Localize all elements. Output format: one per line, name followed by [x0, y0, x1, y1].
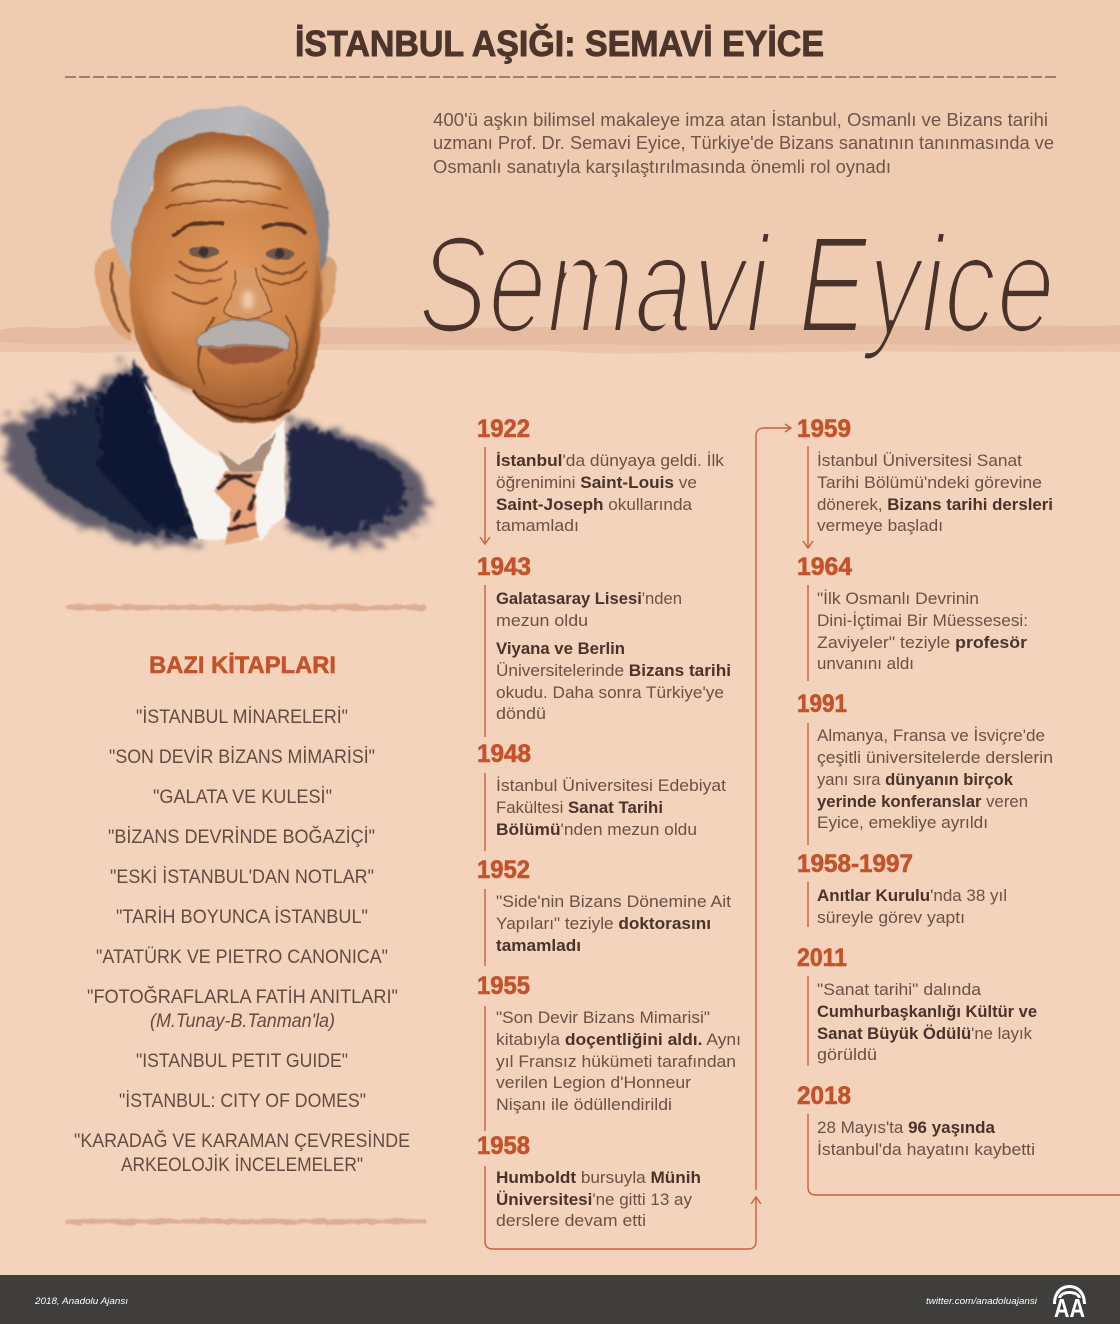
book list: [74, 707, 410, 1176]
timeline: 1943: okudu. Daha sonra Türkiye'ye: [496, 683, 724, 702]
jacket: [28, 362, 406, 538]
timeline: 1948: İstanbul Üniversitesi Edebiyat: [496, 776, 726, 795]
timeline: 1991: 1991: [797, 690, 847, 718]
timeline: 1922: [477, 415, 724, 535]
timeline: 2018: 2018: [797, 1082, 851, 1110]
timeline: 1955: "Son Devir Bizans Mimarisi": [496, 1008, 710, 1027]
timeline: 1948: Fakültesi Sanat Tarihi: [496, 798, 663, 817]
book list: "ATATÜRK VE PIETRO CANONICA": [96, 947, 388, 968]
timeline: 1991: [797, 690, 1053, 832]
intro text: [433, 110, 1054, 177]
timeline: 1952: Yapıları" teziyle doktorasını: [496, 914, 711, 933]
hair: [111, 107, 329, 275]
face: [129, 133, 322, 423]
timeline: 1958-1997: süreyle görev yaptı: [817, 908, 965, 927]
timeline: 1959: vermeye başladı: [817, 516, 943, 535]
timeline: 1991: Almanya, Fransa ve İsviçre'de: [817, 726, 1045, 745]
timeline: 1964: [797, 553, 1028, 673]
icon: AA logo: [1053, 1285, 1086, 1323]
timeline: 2011: 2011: [797, 944, 847, 972]
timeline: 2018: [797, 1082, 1035, 1159]
timeline: 1991: yerinde konferanslar veren: [817, 792, 1028, 811]
timeline connectors: [480, 424, 1120, 1249]
timeline: 1922: İstanbul'da dünyaya geldi. İlk: [496, 451, 724, 470]
title divider: [65, 76, 1056, 78]
jaw line: [193, 390, 290, 419]
timeline: 1943: Viyana ve Berlin: [496, 639, 625, 658]
necktie: [213, 471, 260, 546]
footer: [0, 1275, 1120, 1324]
timeline: 1959: dönerek, Bizans tarihi dersleri: [817, 495, 1053, 514]
timeline: 1958: derslere devam etti: [496, 1211, 646, 1230]
timeline: 2011: görüldü: [817, 1045, 877, 1064]
footer twitter: twitter.com/anadoluajansi: [926, 1296, 1038, 1307]
timeline: 1948: [477, 740, 726, 839]
brows and eyes: [172, 222, 306, 273]
timeline: 1955: kitabıyla doçentliğini aldı. Aynı: [496, 1030, 741, 1049]
timeline: 1948: 1948: [477, 740, 531, 768]
timeline: 1943: mezun oldu: [496, 611, 588, 630]
timeline: 1958: [477, 1132, 701, 1230]
book list: "İSTANBUL MİNARELERİ": [136, 707, 348, 728]
timeline: 2011: "Sanat tarihi" dalında: [817, 980, 982, 999]
timeline: 1964: Dini-İçtimai Bir Müessesesi:: [817, 611, 1028, 630]
timeline: 1959: İstanbul Üniversitesi Sanat: [817, 451, 1022, 470]
timeline: 1991: Eyice, emekliye ayrıldı: [817, 813, 988, 832]
book list: "FOTOĞRAFLARLA FATİH ANITLARI": [87, 986, 398, 1008]
timeline: 1964: unvanını aldı: [817, 654, 914, 673]
timeline: 2018: İstanbul'da hayatını kaybetti: [817, 1140, 1035, 1159]
timeline: 1952: 1952: [477, 856, 530, 884]
book list: "ISTANBUL PETIT GUIDE": [136, 1051, 348, 1072]
timeline: 1958-1997: 1958-1997: [797, 850, 913, 878]
background: upper paper: [0, 0, 1120, 345]
panel: books: [74, 652, 410, 1176]
decorative strip top: [66, 605, 426, 610]
timeline: 1943: Galatasaray Lisesi'nden: [496, 589, 682, 608]
timeline: 1958: Humboldt bursuyla Münih: [496, 1168, 701, 1187]
timeline: 1943: [477, 553, 731, 723]
timeline: 1958: 1958: [477, 1132, 530, 1160]
book list: "SON DEVİR BİZANS MİMARİSİ": [109, 747, 375, 768]
timeline: 1922: öğrenimini Saint-Louis ve: [496, 473, 697, 492]
timeline: 1943: döndü: [496, 704, 546, 723]
nose: [224, 268, 272, 319]
timeline: 1948: Bölümü'nden mezun oldu: [496, 820, 697, 839]
book list: "KARADAĞ VE KARAMAN ÇEVRESİNDE: [74, 1130, 410, 1152]
icon: AA logo: AA: [1054, 1293, 1085, 1323]
jacket fade: [2, 365, 427, 548]
book list: "İSTANBUL: CITY OF DOMES": [119, 1091, 366, 1112]
book list: "GALATA VE KULESİ": [153, 787, 332, 808]
intro text: Osmanlı sanatıyla karşılaştırılmasında önemli rol oynadı: [433, 157, 891, 177]
timeline: 1959: [797, 415, 1053, 535]
timeline: 2018: 28 Mayıs'ta 96 yaşında: [817, 1118, 996, 1137]
timeline: 1955: [477, 972, 741, 1114]
timeline: 1964: Zaviyeler" teziyle profesör: [817, 633, 1027, 652]
timeline: 2011: Sanat Büyük Ödülü'ne layık: [817, 1024, 1032, 1043]
left ear inner: [111, 262, 130, 332]
torn paper band: [0, 325, 1120, 354]
shirt collar: [144, 382, 285, 540]
timeline: 1943: Üniversitelerinde Bizans tarihi: [496, 661, 731, 680]
portrait: Semavi Eyice: [2, 107, 427, 548]
background: lower paper: [0, 345, 1120, 1324]
timeline: 1959: Tarihi Bölümü'ndeki görevine: [817, 473, 1042, 492]
forehead highlight: [170, 152, 280, 204]
timeline: 1958-1997: [797, 850, 1007, 927]
left ear: [96, 247, 140, 340]
timeline: 1952: tamamladı: [496, 936, 581, 955]
timeline: 1922: 1922: [477, 415, 530, 443]
timeline: 2011: [797, 944, 1037, 1064]
shirt shadow: [218, 432, 276, 474]
book list: ARKEOLOJİK İNCELEMELER": [121, 1155, 363, 1176]
timeline: 1964: "İlk Osmanlı Devrinin: [817, 589, 979, 608]
timeline: 1964: 1964: [797, 553, 852, 581]
decorative strip bottom: [66, 1219, 426, 1224]
footer copyright: 2018, Anadolu Ajansı: [34, 1296, 128, 1307]
nose highlight: [242, 290, 254, 310]
intro text: 400'ü aşkın bilimsel makaleye imza atan İstanbul, Osmanlı ve Bizans tarihi: [433, 110, 1048, 130]
wrinkles: [165, 181, 308, 407]
mouth: [207, 346, 284, 364]
book list: "TARİH BOYUNCA İSTANBUL": [116, 907, 368, 928]
timeline: 2011: Cumhurbaşkanlığı Kültür ve: [817, 1002, 1037, 1021]
timeline: 1991: çeşitli üniversitelerde derslerin: [817, 748, 1053, 767]
title: İSTANBUL AŞIĞI: SEMAVİ EYİCE: [295, 23, 824, 64]
timeline: 1991: yanı sıra dünyanın birçok: [817, 770, 1014, 789]
timeline: 1922: Saint-Joseph okullarında: [496, 495, 693, 514]
intro text: uzmanı Prof. Dr. Semavi Eyice, Türkiye'de Bizans sanatının tanınmasında ve: [433, 133, 1054, 153]
timeline: 1958-1997: Anıtlar Kurulu'nda 38 yıl: [817, 886, 1007, 905]
timeline: 1955: 1955: [477, 972, 530, 1000]
timeline: 1943: 1943: [477, 553, 531, 581]
timeline: 1922: tamamladı: [496, 516, 579, 535]
timeline: 1955: verilen Legion d'Honneur: [496, 1073, 691, 1092]
timeline: 1952: [477, 856, 731, 955]
books heading: BAZI KİTAPLARI: [149, 652, 336, 679]
right ear: [312, 257, 337, 332]
timeline: 1958: Üniversitesi'ne gitti 13 ay: [496, 1190, 692, 1209]
face shadow: [133, 250, 320, 418]
book list: (M.Tunay-B.Tanman'la): [150, 1011, 335, 1032]
timeline: 1955: Nişanı ile ödüllendirildi: [496, 1095, 672, 1114]
timeline: 1952: "Side'nin Bizans Dönemine Ait: [496, 892, 731, 911]
book list: "ESKİ İSTANBUL'DAN NOTLAR": [110, 867, 374, 888]
moustache: [197, 320, 289, 350]
timeline: 1955: yıl Fransız hükümeti tarafından: [496, 1052, 736, 1071]
book list: "BİZANS DEVRİNDE BOĞAZİÇİ": [108, 826, 375, 848]
timeline: 1959: 1959: [797, 415, 851, 443]
cheek highlight: [154, 275, 202, 335]
